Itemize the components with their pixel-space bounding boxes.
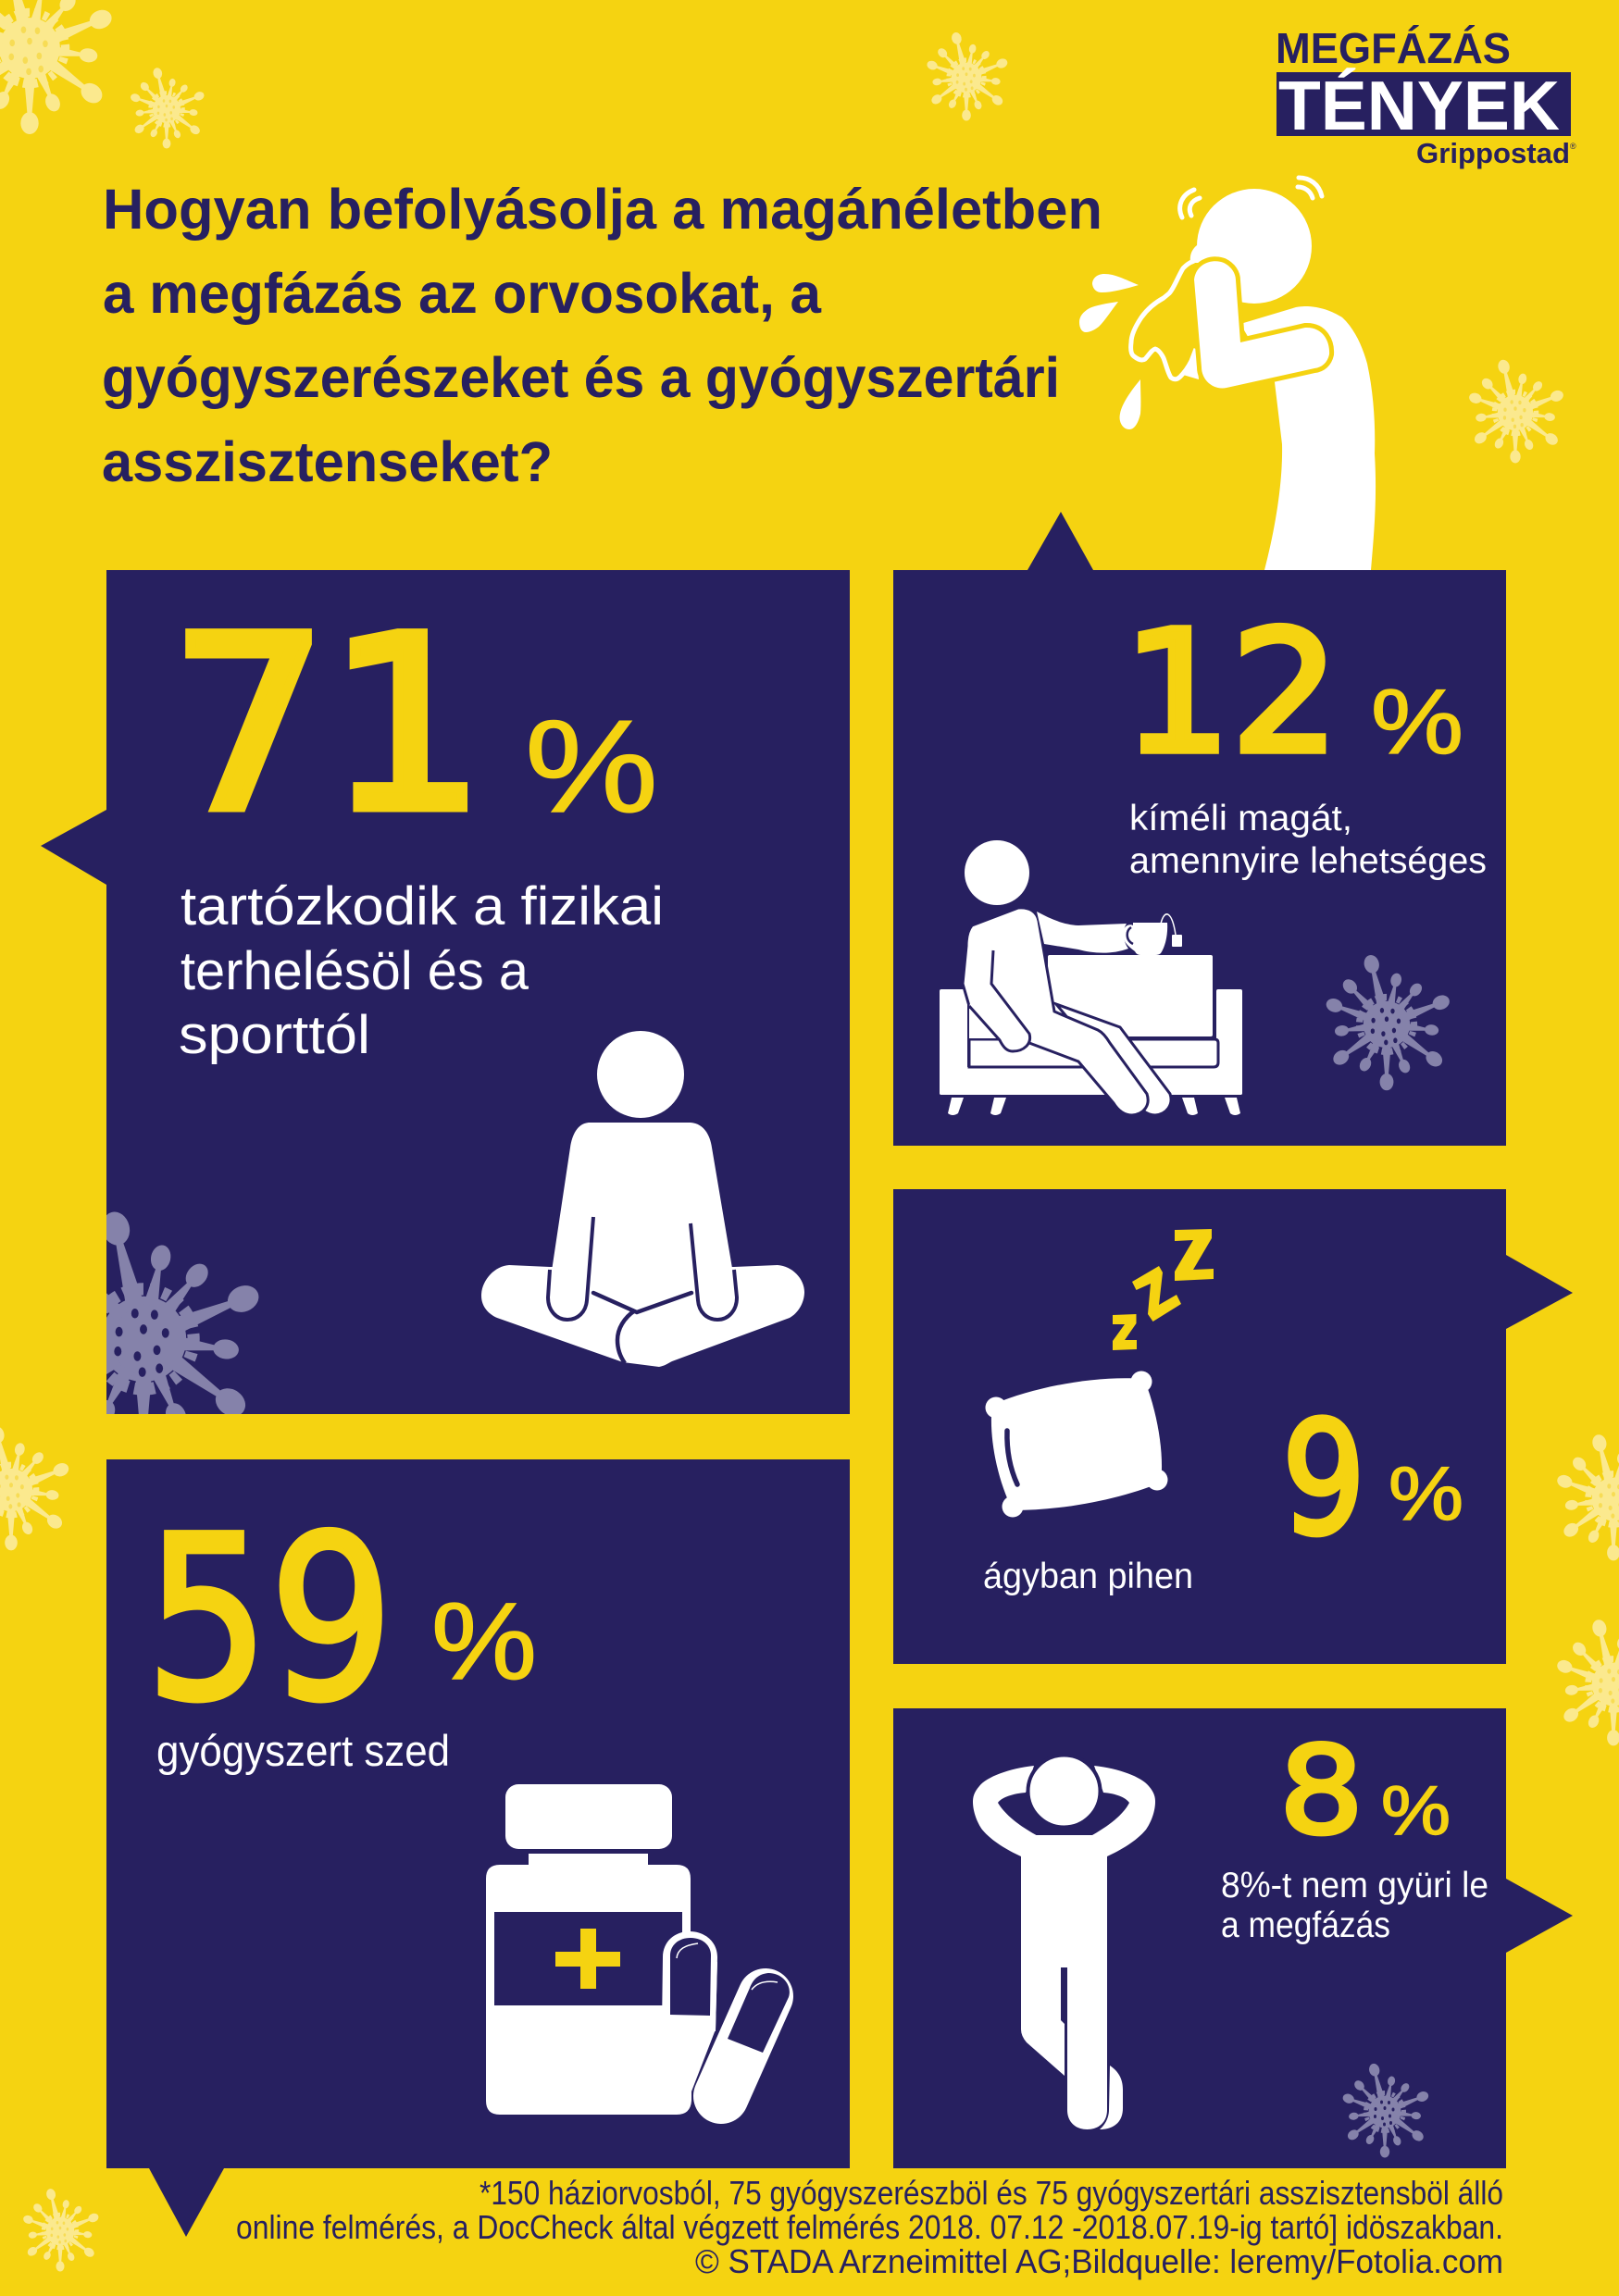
panel: 12 percent xyxy=(893,512,1506,1146)
panel background with arrow xyxy=(893,512,1506,1146)
panel background with arrow xyxy=(893,1708,1573,2168)
description xyxy=(179,876,664,1065)
title xyxy=(102,178,1102,493)
description: 8%-t nem gyüri le xyxy=(1221,1866,1488,1905)
tea cup xyxy=(1123,923,1167,955)
percent sign: % xyxy=(1371,670,1463,773)
number: 8 xyxy=(1279,1720,1364,1861)
head xyxy=(965,840,1029,905)
far leg xyxy=(1056,1004,1171,1115)
description: tartózkodik a fizikai xyxy=(181,876,664,937)
tissue lower piece xyxy=(1183,347,1199,379)
icon: person on sofa with tea xyxy=(940,840,1242,1115)
icon: sneezing person xyxy=(1079,178,1376,570)
description: sporttól xyxy=(179,1005,370,1065)
sofa xyxy=(1048,955,1213,1036)
panel background with arrow xyxy=(41,570,850,1414)
sound marks xyxy=(1180,190,1200,217)
title: asszisztenseket? xyxy=(102,430,553,493)
brand name: Grippostad xyxy=(1416,137,1570,169)
description: a megfázás xyxy=(1221,1905,1390,1945)
percent sign: % xyxy=(525,693,658,840)
near leg and torso xyxy=(963,908,1148,1115)
description xyxy=(1129,799,1487,881)
tissue xyxy=(1131,261,1196,379)
logo box xyxy=(1277,72,1571,136)
footnote: *150 háziorvosból, 75 gyógyszerészböl és 75 gyógyszertári asszisztensböl álló xyxy=(479,2174,1503,2212)
number: 9 xyxy=(1282,1388,1365,1570)
logo xyxy=(1276,24,1576,169)
description: terhelésöl és a xyxy=(181,941,529,1001)
description: gyógyszert szed xyxy=(156,1726,450,1775)
panel: 59 percent xyxy=(106,1459,850,2237)
registered mark: ® xyxy=(1570,142,1576,151)
panel: 8 percent xyxy=(893,1708,1573,2168)
icon: sitting cross-legged person xyxy=(481,1031,804,1367)
description xyxy=(1221,1866,1488,1945)
logo line: Megfázás: MEGFÁZÁS xyxy=(1276,24,1511,72)
number: 59 xyxy=(145,1488,393,1751)
logo line: Tények: TÉNYEK xyxy=(1278,67,1560,144)
head-side bump xyxy=(1190,245,1203,263)
title: a megfázás az orvosokat, a xyxy=(103,262,822,325)
resting arm xyxy=(969,950,1030,1051)
percent sign: % xyxy=(1381,1771,1451,1849)
panel background with arrow xyxy=(893,1189,1573,1664)
panel background with arrow xyxy=(106,1459,850,2237)
virus xyxy=(1325,953,1451,1090)
panel: 9 percent xyxy=(893,1189,1573,1664)
number: 71 xyxy=(170,586,485,863)
footnote xyxy=(236,2174,1503,2280)
raised arm xyxy=(1194,261,1329,388)
percent sign: % xyxy=(431,1581,537,1703)
icon: relaxed standing person xyxy=(973,1755,1155,2129)
virus xyxy=(106,1212,259,1414)
sleep letters xyxy=(1113,1229,1214,1350)
title: Hogyan befolyásolja a magánéletben xyxy=(103,178,1102,241)
virus xyxy=(1341,2063,1430,2157)
title: gyógyszerészeket és a gyógyszertári xyxy=(102,346,1060,409)
icon: pillow xyxy=(985,1371,1168,1518)
body xyxy=(1240,306,1376,570)
description: kíméli magát, xyxy=(1129,799,1352,838)
tea bag xyxy=(1161,914,1176,935)
description: amennyire lehetséges xyxy=(1129,841,1487,881)
number: 12 xyxy=(1123,595,1339,790)
description: ágyban pihen xyxy=(983,1557,1193,1596)
percent sign: % xyxy=(1389,1452,1463,1536)
icon: medicine bottle and pills xyxy=(486,1784,790,2115)
arm holding cup xyxy=(1037,912,1128,953)
panel: 71 percent xyxy=(29,570,850,1460)
footnote: © STADA Arzneimittel AG;Bildquelle: leremy/Fotolia.com xyxy=(695,2242,1503,2280)
head xyxy=(1197,189,1312,304)
drops xyxy=(1092,274,1139,292)
